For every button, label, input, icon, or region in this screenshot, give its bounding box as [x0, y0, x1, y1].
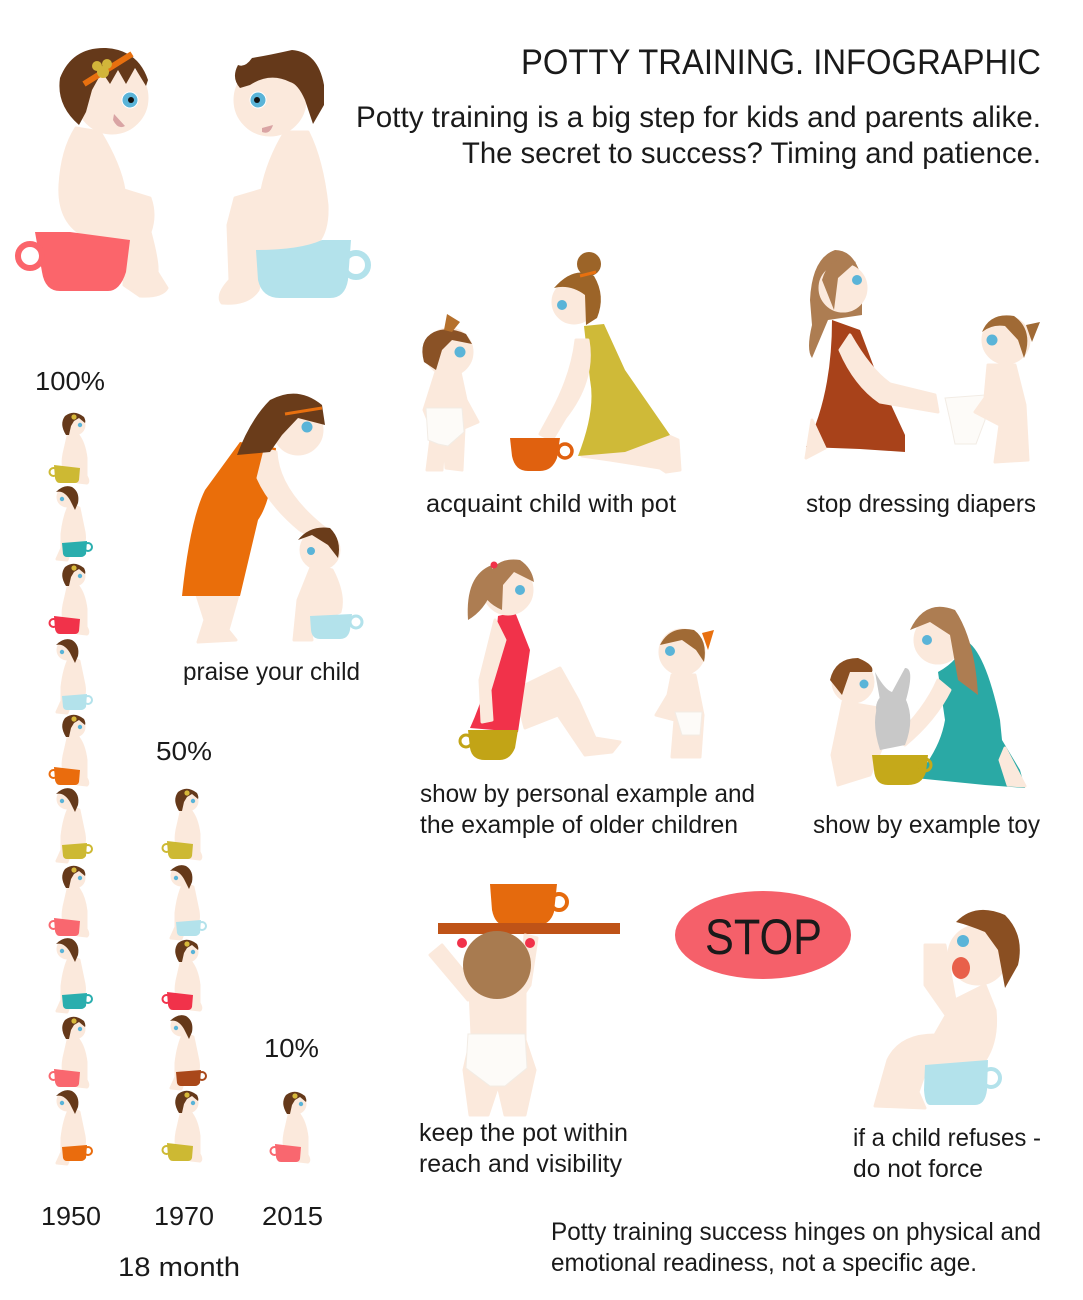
callout: stop sign: STOP [705, 909, 822, 965]
column 2015: 10% [264, 1033, 319, 1063]
panel: praise your child [182, 394, 362, 686]
panel: acquaint child with pot: acquaint child with pot [426, 490, 676, 518]
text block: closing note: emotional readiness, not a specific age. [551, 1249, 977, 1277]
callout: stop sign [675, 891, 851, 979]
column 1970 [154, 736, 214, 1231]
column 1950: 100% [35, 366, 105, 396]
text block: introduction: The secret to success? Timing and patience. [462, 137, 1041, 170]
axis label: 18 month [118, 1252, 240, 1282]
panel: if a child refuses: do not force [853, 1155, 983, 1183]
heading: title: POTTY TRAINING. INFOGRAPHIC [521, 43, 1041, 82]
panel: stop dressing diapers [806, 250, 1040, 518]
text block: introduction: Potty training is a big step for kids and parents alike. [356, 101, 1041, 134]
panel: show by example toy: show by example toy [813, 811, 1040, 839]
panel: if a child refuses [853, 910, 1041, 1183]
text block: closing note [551, 1218, 1041, 1277]
panel: show by personal example: the example of older children [420, 811, 738, 839]
illustration: boy on blue potty [220, 50, 368, 303]
panel: keep the pot within reach: keep the pot within [419, 1119, 628, 1147]
panel: show by personal example: show by personal example and [420, 780, 755, 808]
panel: acquaint child with pot [422, 252, 680, 518]
text block: closing note: Potty training success hinges on physical and [551, 1218, 1041, 1246]
column 2015: 2015 [262, 1201, 323, 1231]
panel: praise your child: praise your child [183, 658, 360, 686]
chart: kids potty trained by 18 months [35, 366, 323, 1282]
panel: stop dressing diapers: stop dressing diapers [806, 490, 1036, 518]
panel: keep the pot within reach: reach and visibility [419, 1150, 622, 1178]
column 1950 [35, 366, 105, 1231]
text block: introduction [356, 101, 1041, 170]
column 1970: 50% [156, 736, 212, 766]
column 1970: 1970 [154, 1201, 214, 1231]
illustration: girl on red potty [18, 48, 167, 296]
column 1950: 1950 [41, 1201, 101, 1231]
panel: keep the pot within reach [419, 884, 628, 1178]
column 2015 [262, 1033, 323, 1231]
panel: show by personal example [420, 560, 755, 839]
panel: show by example toy [813, 607, 1040, 839]
panel: if a child refuses: if a child refuses - [853, 1124, 1041, 1152]
